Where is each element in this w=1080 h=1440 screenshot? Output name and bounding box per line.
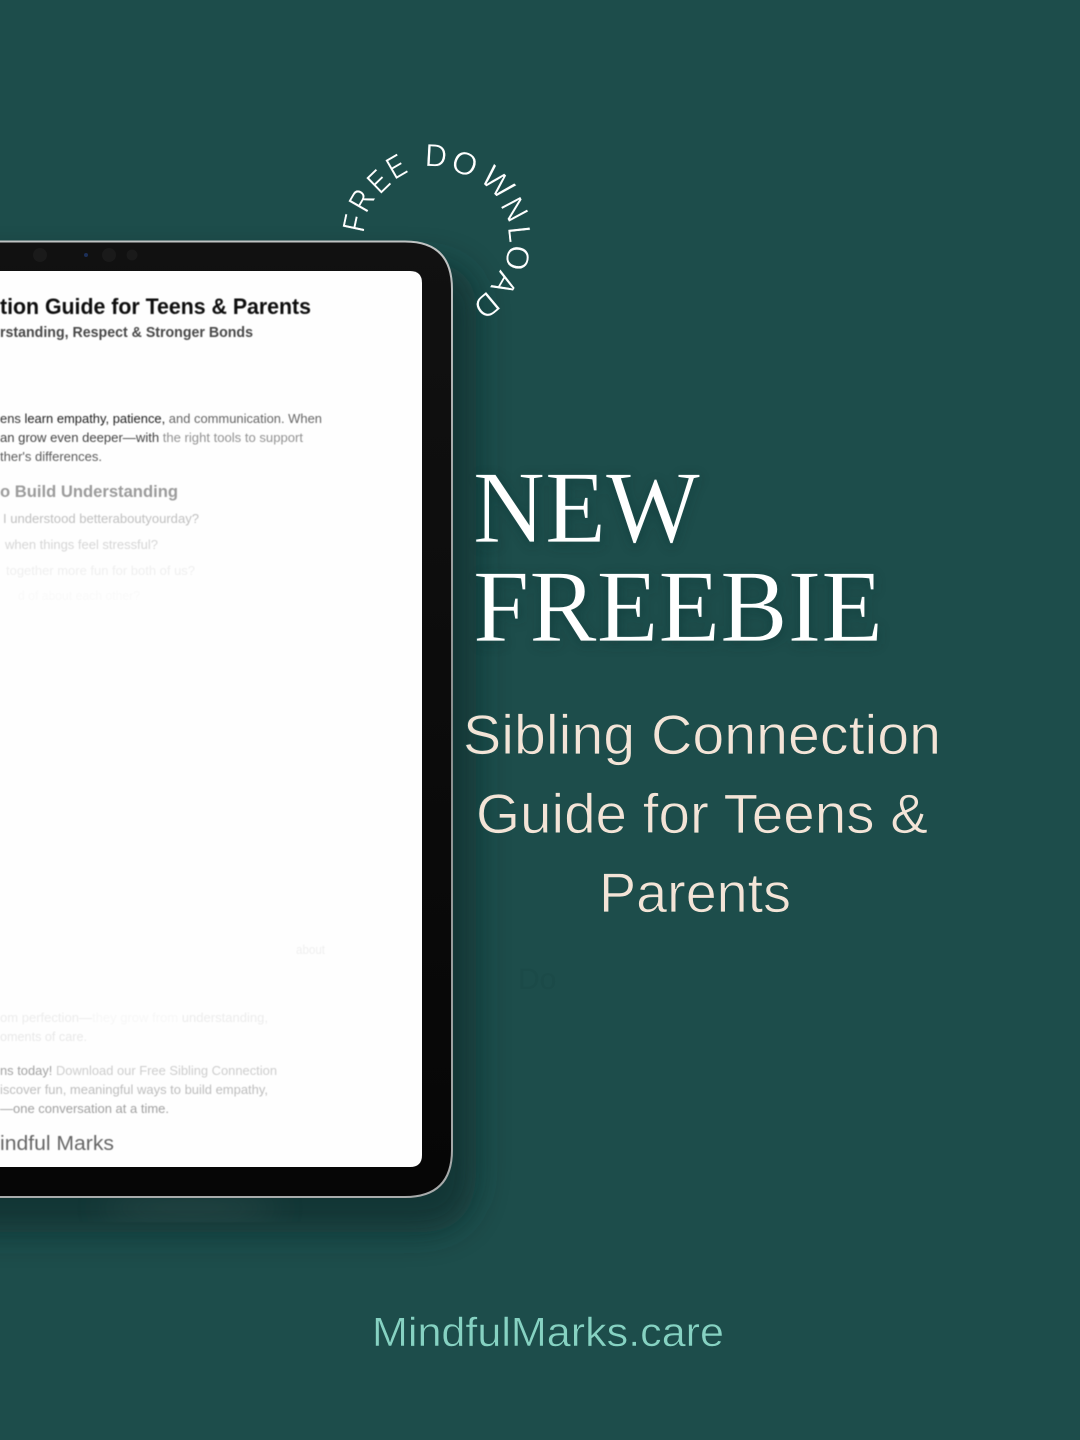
- curved badge: free download: N: [493, 191, 535, 227]
- document title: tion Guide for Teens & Parents: [0, 294, 311, 319]
- screen document text: [0, 294, 325, 1155]
- heading shadow: [475, 454, 883, 667]
- heading text: [473, 451, 883, 664]
- heading text: FREEBIE: [473, 550, 883, 664]
- heading: new freebie: [473, 451, 883, 667]
- section heading: o Build Understanding: [0, 483, 178, 501]
- faint ghost letters: Do: [518, 963, 556, 996]
- camera sensors: [33, 248, 138, 262]
- curved badge: free download: E: [361, 163, 397, 201]
- closing paragraph: iscover fun, meaningful ways to build empathy,: [0, 1082, 268, 1097]
- tablet drop shadow: [0, 262, 476, 1232]
- faded question list: when things feel stressful?: [4, 537, 158, 552]
- subtitle: guide name: Sibling Connection: [463, 703, 941, 766]
- curved badge: free download: D: [467, 285, 506, 326]
- closing paragraph: —one conversation at a time.: [0, 1101, 169, 1116]
- subtitle: guide name: Parents: [599, 861, 791, 924]
- faded question list: together more fun for both of us?: [6, 563, 195, 578]
- closing paragraph: ns today! Download our Free Sibling Connection: [0, 1063, 277, 1078]
- intro paragraph: an grow even deeper—with the right tools to support: [0, 430, 303, 445]
- website url: MindfulMarks.care: [372, 1309, 724, 1355]
- subtitle: guide name: Guide for Teens &: [476, 782, 928, 845]
- heading shadow: FREEBIE: [475, 553, 883, 667]
- tablet screen: [0, 271, 422, 1167]
- heading text: NEW: [473, 451, 701, 565]
- document signature: indful Marks: [0, 1133, 114, 1155]
- faded question list: about: [296, 942, 325, 957]
- curved badge: free download: A: [483, 266, 525, 303]
- tablet body: [0, 242, 452, 1197]
- document subtitle: rstanding, Respect & Stronger Bonds: [0, 325, 253, 341]
- curved badge: free download: E: [381, 148, 413, 187]
- closing paragraph: om perfection—they grow from understanding,: [0, 1010, 268, 1025]
- curved badge: free download: F: [336, 211, 374, 235]
- faint glow below tablet: [100, 1199, 280, 1217]
- curved badge: free download: O: [498, 243, 537, 273]
- curved badge: free download: R: [342, 183, 382, 218]
- tablet: [0, 242, 452, 1197]
- curved badge: free download: O: [447, 142, 483, 185]
- curved badge: free download: W: [474, 158, 522, 206]
- curved badge: free download: D: [424, 137, 448, 174]
- intro paragraph: [0, 411, 322, 464]
- curved badge: free download: L: [500, 224, 538, 244]
- faded question list: [3, 511, 325, 957]
- intro paragraph: ens learn empathy, patience, and communication. When: [0, 411, 322, 426]
- faded question list: d of about each other?: [18, 588, 140, 603]
- closing paragraph: [0, 1010, 277, 1116]
- faded question list: I understood betteraboutyourday?: [3, 511, 199, 526]
- curved badge: free download: [336, 137, 538, 326]
- heading shadow: NEW: [475, 454, 701, 568]
- intro paragraph: ther's differences.: [0, 449, 102, 464]
- closing paragraph: oments of care.: [0, 1029, 87, 1044]
- subtitle: guide name: [463, 703, 941, 924]
